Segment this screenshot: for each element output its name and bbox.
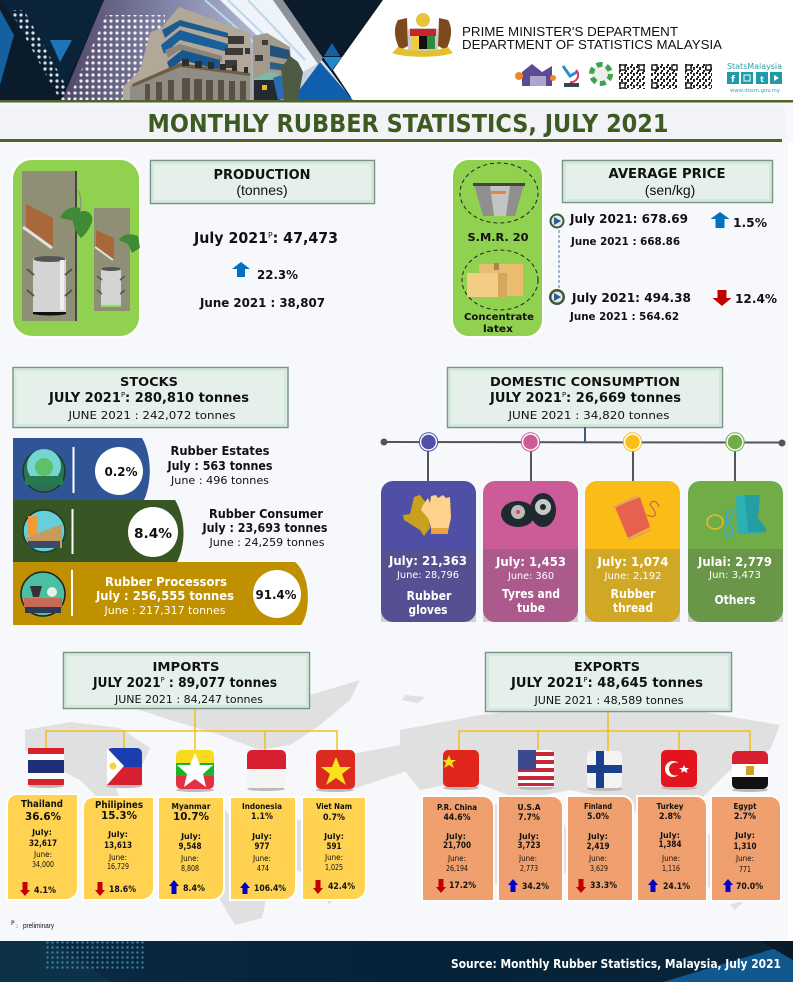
card: Finland: Finland <box>584 802 612 811</box>
card: P.R. China: 17.2% <box>449 881 476 891</box>
card: Thailand: 4.1% <box>34 886 56 896</box>
domestic consumption header: JULY 2021 <box>490 390 565 406</box>
card: Thailand: Thailand <box>21 799 63 810</box>
preliminary footnote <box>11 920 54 930</box>
panel: price products <box>452 159 543 337</box>
leaves <box>60 207 140 253</box>
panel: price products: latex <box>483 324 514 335</box>
card: Egypt: 70.0% <box>736 882 763 892</box>
card: Egypt: July: <box>734 831 755 840</box>
card: Myanmar <box>158 797 224 900</box>
title band <box>0 107 785 142</box>
logo: StatsMalaysia: f <box>731 75 735 85</box>
card: Myanmar: 8.4% <box>183 884 205 894</box>
stocks: rubber processors: Rubber Processors <box>105 575 227 589</box>
large tree trunk <box>22 171 77 321</box>
stocks: rubber estates: Rubber Estates <box>170 444 270 458</box>
imports header: P <box>161 676 165 684</box>
logo: StatsMalaysia <box>727 62 782 94</box>
building <box>123 7 303 100</box>
card: rubber gloves: gloves <box>408 603 448 617</box>
card: Finland <box>567 796 633 901</box>
latex prices: July 2021: 494.38 <box>571 290 691 305</box>
production header: (tonnes) <box>236 182 288 198</box>
card: tyres and tube: Tyres and <box>502 587 560 601</box>
card: Thailand: 32,617 <box>29 839 57 849</box>
stocks: rubber consumer: 8.4% <box>134 526 172 542</box>
icon: estate <box>23 449 65 492</box>
logo: census <box>515 64 556 86</box>
card: Philippines: Philipines <box>95 800 143 811</box>
card: U.S.A: U.S.A <box>518 803 541 812</box>
imports header: IMPORTS <box>152 659 220 674</box>
card: U.S.A: 3,723 <box>518 841 540 851</box>
SMR 20 prices: 1.5% <box>733 215 767 230</box>
exports header: JUNE 2021 : 48,589 tonnes <box>533 694 684 707</box>
card: rubber gloves: June: 28,796 <box>396 570 459 581</box>
card: P.R. China: June: <box>447 854 466 863</box>
small cup <box>97 267 125 307</box>
card: rubber thread: thread <box>613 601 653 615</box>
card: Turkey: Turkey <box>656 802 684 811</box>
domestic consumption header: : 26,669 tonnes <box>566 390 681 406</box>
stocks: rubber consumer: July : 23,693 tonnes <box>202 521 328 535</box>
banner sky panel <box>62 0 352 100</box>
card: Indonesia: Indonesia <box>242 802 282 811</box>
production figures: July 2021 <box>194 229 272 247</box>
card: Thailand <box>7 794 78 900</box>
card: rubber thread <box>585 481 680 622</box>
card: Thailand: 34,000 <box>32 860 54 869</box>
average price header <box>562 160 772 202</box>
card: P.R. China: 21,700 <box>443 841 471 851</box>
card: tyres and tube: tube <box>517 601 545 615</box>
domestic consumption header: JUNE 2021 : 34,820 tonnes <box>507 409 670 422</box>
flag: Viet Nam <box>316 750 355 792</box>
card: rubber gloves <box>381 481 476 622</box>
stocks header: P <box>121 391 125 399</box>
production header: PRODUCTION <box>214 168 310 183</box>
card: Myanmar: 9,548 <box>178 842 202 852</box>
card: P.R. China <box>422 796 494 901</box>
card: P.R. China: P.R. China <box>437 803 477 812</box>
banner blue triangles <box>0 10 14 85</box>
card: Thailand: June: <box>33 850 52 859</box>
card: U.S.A: 7.7% <box>518 813 540 823</box>
card: Myanmar: 10.7% <box>173 811 209 823</box>
card: U.S.A: July: <box>518 832 539 841</box>
production figures <box>193 229 338 310</box>
ground floor block <box>130 65 250 100</box>
card: Indonesia <box>230 797 296 900</box>
header logos <box>515 62 782 94</box>
latex prices: June 2021 : 564.62 <box>569 311 679 323</box>
card: Indonesia: 106.4% <box>254 884 286 894</box>
card: Finland: 3,629 <box>590 864 608 873</box>
exports header <box>486 652 732 712</box>
flag: USA <box>518 750 554 790</box>
flag: Philippines <box>106 748 142 788</box>
card: Turkey: 2.8% <box>659 812 681 822</box>
card: Viet Nam <box>302 797 366 900</box>
exports header: JULY 2021 <box>511 675 586 691</box>
arrow down <box>712 290 732 306</box>
imports header <box>64 652 310 708</box>
card: Viet Nam: July: <box>323 832 344 841</box>
card: Egypt: 771 <box>739 865 751 874</box>
card: Indonesia: 1.1% <box>251 812 273 822</box>
card: Philippines: 15.3% <box>101 810 137 822</box>
small tree trunk <box>94 208 130 311</box>
flag: Finland <box>587 751 623 791</box>
production header <box>150 160 374 204</box>
stocks: rubber processors: June : 217,317 tonnes <box>104 604 226 617</box>
card: Turkey: 1,116 <box>662 864 680 873</box>
icon: thread spool <box>613 496 659 540</box>
card: Indonesia: 474 <box>257 864 269 873</box>
card: rubber thread: July: 1,074 <box>597 555 668 569</box>
average price header: AVERAGE PRICE <box>608 167 726 182</box>
arrow up <box>710 212 730 228</box>
stocks header: JUNE 2021 : 242,072 tonnes <box>67 409 236 422</box>
exports header: EXPORTS <box>574 659 640 674</box>
arrow up <box>232 262 250 277</box>
card: Myanmar: Myanmar <box>172 802 211 811</box>
card: Viet Nam: 0.7% <box>323 813 345 823</box>
card: others <box>688 481 783 622</box>
logo: StatsMalaysia: StatsMalaysia <box>727 62 782 71</box>
bullet <box>549 289 565 305</box>
icon: gloves <box>403 495 451 536</box>
card: U.S.A <box>498 796 563 901</box>
SMR 20 prices: July 2021: 678.69 <box>569 211 688 226</box>
production figures: P <box>268 231 273 240</box>
exports header: P <box>583 676 587 684</box>
emblem <box>392 13 453 57</box>
preliminary footnote: : <box>16 923 18 930</box>
department name: PRIME MINISTER'S DEPARTMENT <box>462 25 678 39</box>
card: tyres and tube: July: 1,453 <box>495 555 566 569</box>
exports header: : 48,645 tonnes <box>587 675 703 691</box>
flag: China <box>443 750 479 790</box>
card: rubber gloves: Rubber <box>406 589 452 603</box>
card: Viet Nam: 42.4% <box>328 882 355 892</box>
card: Finland: 33.3% <box>590 881 617 891</box>
SMR bucket icon <box>460 163 538 223</box>
large cup <box>27 256 72 316</box>
domestic consumption header: P <box>562 391 566 399</box>
flag: Myanmar <box>176 750 214 792</box>
icon: factory <box>23 510 65 552</box>
header rule <box>0 100 793 102</box>
header dark background <box>0 0 383 100</box>
latex boxes icon <box>462 250 538 310</box>
panel: production illustration <box>12 159 140 337</box>
icon: tyres <box>501 493 556 527</box>
flag: Indonesia <box>247 750 286 791</box>
stocks header: : 280,810 tonnes <box>125 390 249 406</box>
card: Egypt: June: <box>735 854 754 863</box>
flag: Egypt <box>732 751 768 792</box>
card: Philippines: July: <box>107 830 128 839</box>
world map background <box>25 680 780 925</box>
latex prices: 12.4% <box>735 291 777 306</box>
flag: Turkey <box>661 750 697 790</box>
card: Thailand: July: <box>31 828 52 837</box>
card: Egypt <box>711 796 781 901</box>
QR codes <box>619 64 712 89</box>
panel: price products: Concentrate <box>464 312 534 323</box>
title band: MONTHLY RUBBER STATISTICS, JULY 2021 <box>148 109 668 138</box>
card: Philippines: 18.6% <box>109 885 136 895</box>
card: Myanmar: 8,808 <box>181 864 199 873</box>
card: tyres and tube <box>483 481 578 622</box>
card: P.R. China: 26,194 <box>446 864 468 873</box>
card: U.S.A: 34.2% <box>522 882 549 892</box>
card: Egypt: 1,310 <box>734 842 756 852</box>
stocks: rubber consumer: June : 24,259 tonnes <box>208 536 325 549</box>
logo: SDG wheel <box>592 64 610 84</box>
imports header: JULY 2021 <box>93 676 165 691</box>
card: others: Julai: 2,779 <box>697 555 772 569</box>
stocks: rubber estates <box>13 438 272 500</box>
card: Philippines: June: <box>108 853 127 862</box>
flag: Thailand <box>28 748 64 788</box>
card: rubber gloves: July: 21,363 <box>388 554 467 568</box>
card: Finland: June: <box>588 854 607 863</box>
banner dot pattern <box>68 15 165 100</box>
card: Egypt: Egypt <box>734 802 757 811</box>
imports header: JUNE 2021 : 84,247 tonnes <box>114 693 263 706</box>
banner white light streaks <box>220 0 318 75</box>
stocks: rubber processors <box>13 562 308 625</box>
SMR 20 prices <box>569 211 767 248</box>
logo: StatsMalaysia: t <box>760 75 764 84</box>
exports connectors <box>459 712 750 751</box>
card: Myanmar: July: <box>180 832 201 841</box>
card: Indonesia: 977 <box>254 842 270 852</box>
imports header: : 89,077 tonnes <box>165 676 277 691</box>
card: Turkey: July: <box>659 831 680 840</box>
card: Indonesia: June: <box>252 854 271 863</box>
card: Finland: 2,419 <box>586 842 610 852</box>
header banner <box>0 0 793 100</box>
logo: statistics day <box>563 66 579 87</box>
card: Philippines: 16,729 <box>107 862 129 871</box>
stocks: rubber consumer <box>13 500 328 562</box>
card: rubber thread: Rubber <box>610 587 656 601</box>
stocks header: JULY 2021 <box>49 390 124 406</box>
card: Turkey: June: <box>661 854 680 863</box>
SMR 20 prices: June 2021 : 668.86 <box>570 236 680 248</box>
department name: DEPARTMENT OF STATISTICS MALAYSIA <box>462 38 723 52</box>
production figures: 22.3% <box>257 268 298 282</box>
card: Finland: 5.0% <box>587 812 609 822</box>
imports connectors <box>46 709 337 750</box>
stocks: rubber processors: July : 256,555 tonnes <box>95 589 234 603</box>
logo: StatsMalaysia: www.dosm.gov.my <box>730 88 781 94</box>
card: P.R. China: July: <box>445 832 466 841</box>
production figures: : 47,473 <box>273 229 338 247</box>
card: U.S.A: 2,773 <box>520 864 538 873</box>
latex prices <box>569 290 777 323</box>
card: Viet Nam: June: <box>324 853 343 862</box>
consumption connector <box>380 427 786 481</box>
icon: processor <box>21 572 65 616</box>
bullet <box>550 214 564 228</box>
card: others: Jun: 3,473 <box>708 570 761 581</box>
stocks: rubber consumer: Rubber Consumer <box>209 507 323 521</box>
price timeline <box>549 214 565 305</box>
card: rubber thread: June: 2,192 <box>603 571 662 582</box>
stocks header: STOCKS <box>120 374 178 389</box>
card: Turkey <box>637 796 707 901</box>
average price header: (sen/kg) <box>645 182 695 198</box>
card: Turkey: 1,384 <box>658 840 682 850</box>
panel: price products: S.M.R. 20 <box>468 231 529 244</box>
stocks: rubber estates: June : 496 tonnes <box>170 474 269 487</box>
card: Viet Nam: Viet Nam <box>316 802 352 811</box>
stocks: rubber estates: 0.2% <box>104 465 138 479</box>
card: Indonesia: July: <box>251 832 272 841</box>
white header area <box>333 0 793 100</box>
preliminary footnote: preliminary <box>23 923 54 930</box>
icon: boots and bands <box>707 495 766 537</box>
card: tyres and tube: June: 360 <box>507 571 554 582</box>
domestic consumption header: DOMESTIC CONSUMPTION <box>490 374 680 389</box>
card: Viet Nam: 1,025 <box>325 863 343 872</box>
card: P.R. China: 44.6% <box>444 813 471 823</box>
preliminary footnote: P <box>11 920 15 927</box>
card: Thailand: 36.6% <box>25 811 61 823</box>
stocks: rubber estates: July : 563 tonnes <box>167 459 272 473</box>
card: Philippines: 13,613 <box>104 841 132 851</box>
department name <box>462 25 723 52</box>
footer banner <box>0 941 793 982</box>
card: U.S.A: June: <box>518 854 537 863</box>
card: Egypt: 2.7% <box>734 812 756 822</box>
card: others: Others <box>714 593 756 607</box>
production figures: June 2021 : 38,807 <box>199 296 325 310</box>
card: Finland: July: <box>587 832 608 841</box>
card: Myanmar: June: <box>180 854 199 863</box>
card: Viet Nam: 591 <box>326 842 342 852</box>
card: Philippines <box>83 797 154 900</box>
stocks: rubber processors: 91.4% <box>256 588 296 602</box>
card: Turkey: 24.1% <box>663 882 690 892</box>
stocks header <box>13 368 288 428</box>
domestic consumption header <box>448 368 722 428</box>
